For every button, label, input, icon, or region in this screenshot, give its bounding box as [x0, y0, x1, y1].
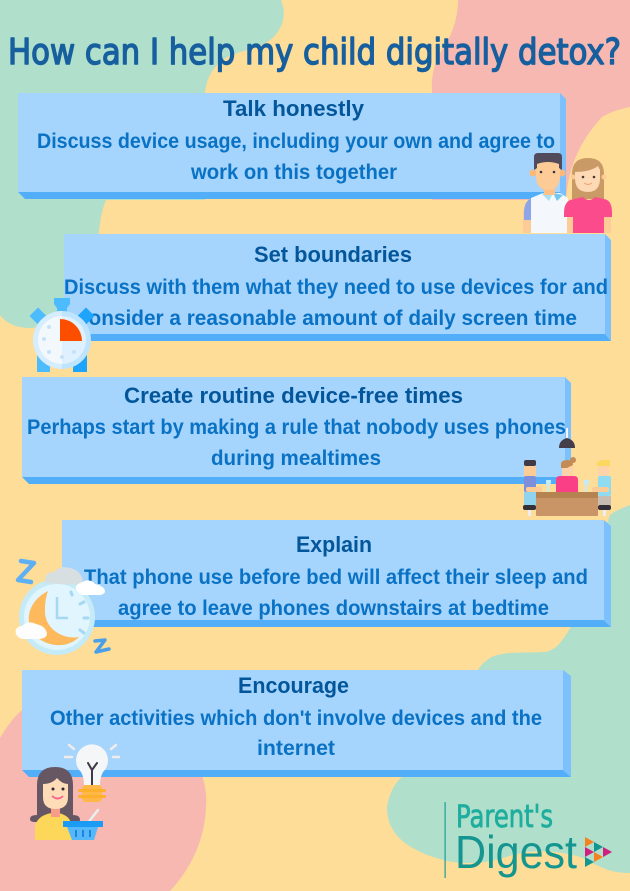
panel: routine device-free times	[22, 377, 571, 484]
background: pink blob bottom left	[0, 710, 206, 891]
panel 5 text	[50, 707, 542, 760]
panel: encourage	[22, 670, 571, 777]
panel 4 text: agree to leave phones downstairs at bedtime	[118, 597, 549, 620]
background: green blob bottom right	[387, 505, 630, 873]
panel 2 text	[64, 276, 608, 330]
panel 5 box	[22, 670, 571, 777]
panel 1 text	[37, 130, 555, 184]
panel 1 box	[18, 93, 566, 199]
panel 4 text	[84, 566, 588, 620]
panel 5 heading: Encourage	[238, 673, 349, 698]
background: pink blob top right	[432, 0, 630, 200]
panel: explain	[62, 520, 611, 627]
panel 3 text: Perhaps start by making a rule that nobody uses phones	[27, 416, 566, 439]
icon: moon clock	[16, 561, 109, 655]
logo: Parent's Digest: Parent's	[456, 799, 553, 835]
panel: talk honestly	[18, 93, 566, 199]
background: green blob top left	[0, 0, 284, 328]
panel 3 box	[22, 377, 571, 484]
panel 4 heading: Explain	[296, 532, 372, 557]
logo: Parent's Digest	[444, 799, 612, 878]
panel 2 text: Discuss with them what they need to use devices for and	[64, 276, 608, 299]
icon: family at table	[523, 428, 611, 516]
panel 2 heading: Set boundaries	[254, 242, 412, 267]
panel 4 box	[62, 520, 611, 627]
panel 1 heading: Talk honestly	[223, 96, 365, 121]
logo: Parent's Digest: Digest	[455, 826, 577, 878]
panel 2 box	[64, 234, 611, 341]
panel 2 text: consider a reasonable amount of daily screen time	[77, 307, 577, 330]
icon: girl with basket	[30, 767, 103, 840]
panel 5 text: internet	[257, 737, 335, 760]
panel: set boundaries	[64, 234, 611, 341]
panel 5 text: Other activities which don't involve devices and the	[50, 707, 542, 730]
icon: light bulb	[65, 744, 119, 802]
panel 3 text: during mealtimes	[211, 447, 381, 470]
panel 1 text: work on this together	[190, 161, 397, 184]
panel 4 text: That phone use before bed will affect their sleep and	[84, 566, 588, 589]
panel 3 text	[27, 416, 566, 470]
panel 3 heading: Create routine device-free times	[124, 383, 463, 408]
icon: stopwatch	[30, 298, 94, 372]
panel 1 text: Discuss device usage, including your own and agree to	[37, 130, 555, 153]
icon: couple	[523, 153, 612, 233]
